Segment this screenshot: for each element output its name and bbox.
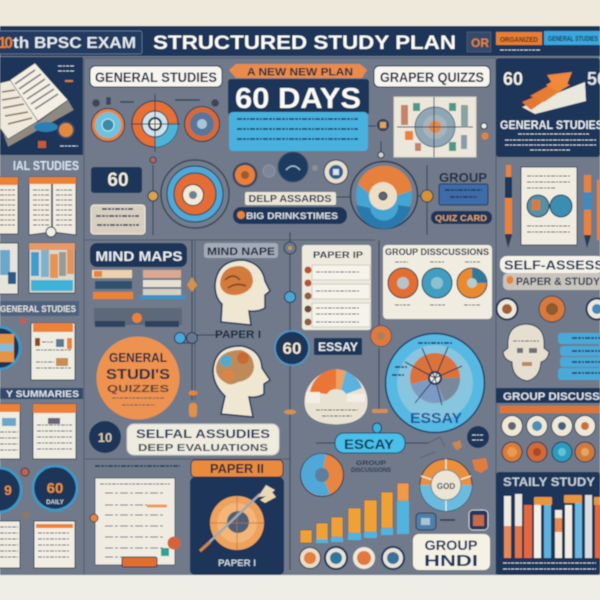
note box: [91, 205, 145, 234]
pill: escay: ESCAY: [344, 436, 395, 452]
connector node: [148, 157, 165, 235]
chart pages: [0, 243, 75, 294]
panel: paper ii: PAPER I: [218, 558, 256, 568]
pill: self assessment: [127, 424, 279, 455]
badge: 60 daily: 60: [47, 480, 63, 497]
circle: blue shield: [184, 106, 220, 142]
heading: paper ii: PAPER II: [210, 462, 264, 476]
badge: navy mini: [89, 421, 121, 453]
icon: hand mini: [452, 440, 462, 450]
page: checklist: [90, 466, 180, 567]
small label: GROUP: [356, 460, 387, 467]
panel: group discussions: [383, 245, 492, 319]
circle: general studies quizzes: [96, 336, 180, 420]
header tags: ORGANIZED: [500, 37, 538, 44]
heading: 60 days: 60 DAYS: [235, 83, 361, 115]
label: self-assess: SELF-ASSESS: [504, 258, 600, 272]
donut: GOD: [437, 482, 455, 491]
banner: group summaries: [0, 301, 79, 324]
badge: 60 daily: [33, 466, 77, 510]
badge: 60 center: 60: [283, 339, 301, 358]
essay dial: ESSAY: [410, 410, 462, 427]
page card: [31, 323, 75, 380]
pill: big drinkstimes: [233, 207, 347, 224]
banner: group discussions: GROUP DISCUSSI: [503, 391, 600, 403]
panel: paper ip: [302, 245, 371, 330]
box: essay: [314, 338, 362, 355]
badge: navy mini: 10: [98, 430, 112, 445]
circle: general studies quizzes: GENERAL: [109, 350, 167, 365]
circle: general studies quizzes: QUIZZES: [107, 383, 169, 395]
label: graper quizzes: GRAPER QUIZZS: [380, 70, 484, 85]
exam label: [0, 31, 142, 54]
panel: daily study chart: STAILY STUDY: [503, 475, 595, 489]
title: STRUCTURED STUDY PLAN: [153, 33, 456, 54]
pill: a new plan: A NEW NEW PLAN: [247, 66, 353, 78]
icon row: [232, 152, 348, 188]
label: paper i: PAPER I: [215, 329, 261, 341]
box: group hindi: [413, 534, 490, 570]
circle: general studies quizzes: STUDI'S: [106, 367, 170, 383]
badge: 60 left: [0, 468, 29, 512]
avatar row: [496, 296, 600, 322]
pill: quiz card: [431, 211, 492, 224]
panel: paper ip: PAPER IP: [313, 250, 364, 261]
pill: help assets: DELP ASSARDS: [248, 194, 332, 205]
label: mind maps: MIND MAPS: [96, 248, 182, 264]
icon: bald face: [503, 324, 549, 381]
circle: teal ring: [92, 108, 124, 142]
ring with page: [0, 327, 20, 369]
label: group: [439, 170, 488, 205]
pie chart: [300, 454, 344, 496]
panel: group discussions: GROUP DISSCUSSIONS: [385, 247, 489, 257]
icon: disc with brush: [200, 485, 276, 551]
box: group hindi: GROUP: [424, 537, 478, 553]
dial right: [336, 162, 418, 229]
icon: orange hand: [472, 458, 488, 473]
badge: 60 daily: DAILY: [46, 500, 64, 506]
pill: self assessment: SELFAL ASSUDIES: [136, 429, 270, 441]
small label: [351, 460, 392, 474]
panel: right top: [496, 58, 600, 157]
banner: group discussions: [496, 388, 600, 413]
box: 60: 60: [107, 170, 129, 191]
icons near group: [416, 510, 488, 530]
connector main: [284, 232, 296, 570]
label: general studies: GENERAL STUDIES: [95, 70, 217, 85]
connector: essay node: [370, 240, 392, 413]
icon: head brain two: [213, 346, 270, 417]
small label: DISCUSSIONS: [351, 467, 392, 474]
doodles right of pill: [420, 437, 462, 458]
quiz image: [394, 97, 476, 157]
essay dial: [386, 334, 484, 432]
stacked blue pills: [558, 333, 600, 380]
pill: big drinkstimes: BIG DRINKSTIMES: [246, 211, 338, 222]
bar chart: [300, 483, 409, 543]
exam label: th BPSC EXAM: [13, 35, 136, 52]
label: mind nape: [204, 243, 278, 258]
pill: self assessment: DEEP EVALUATIONS: [138, 442, 268, 454]
badge: 60 left: 9: [4, 482, 12, 498]
icon group: quiz side icons: [368, 120, 488, 158]
banner: daily summaries: Y SUMMARIES: [6, 389, 79, 400]
label: self-assess: [500, 256, 600, 290]
donut: [420, 459, 472, 511]
panel: paper ii: [190, 460, 284, 575]
box: group hindi: HNDI: [424, 553, 478, 570]
pill: a new plan: [229, 64, 367, 78]
panel: right top: 60: [503, 69, 523, 89]
connector vertical: [174, 240, 220, 417]
description box: [229, 112, 368, 151]
badge: 60 center: [275, 331, 309, 365]
header tags: OR: [471, 36, 489, 50]
header tags: [467, 31, 600, 52]
label: mind maps: [90, 243, 187, 267]
box: 60: [91, 167, 142, 193]
lower pages: [0, 511, 75, 568]
label: graper quizzes: [374, 66, 490, 87]
book pages: [0, 177, 76, 237]
panel: open book: [0, 57, 83, 155]
icon: head brain one: [215, 260, 270, 325]
label: mind nape: MIND NAPE: [207, 246, 275, 258]
pens and worksheet: [505, 165, 600, 248]
icon: navy badge: [467, 426, 489, 448]
gauge: [304, 369, 368, 425]
label: group: GROUP: [439, 170, 487, 185]
small top icons: [93, 98, 218, 106]
banner: group summaries: GENERAL STUDIES: [0, 304, 76, 314]
connector: orange node: [417, 165, 433, 235]
box: essay: ESSAY: [318, 340, 358, 354]
pill: quiz card: QUIZ CARD: [435, 213, 487, 223]
panel: daily study chart: [496, 472, 600, 575]
circle: target: [131, 94, 180, 152]
label: general studies: [90, 66, 222, 87]
callout: 60 days: [228, 64, 369, 151]
mind map cards: [92, 270, 185, 327]
banner: general studies: IAL STUDIES: [13, 159, 79, 173]
summary pages: [0, 404, 76, 459]
circle row: [300, 547, 404, 569]
header bar: [0, 26, 600, 56]
pill: escay: [316, 423, 428, 453]
target dial left: [161, 160, 229, 228]
discussion circles: [502, 416, 596, 462]
